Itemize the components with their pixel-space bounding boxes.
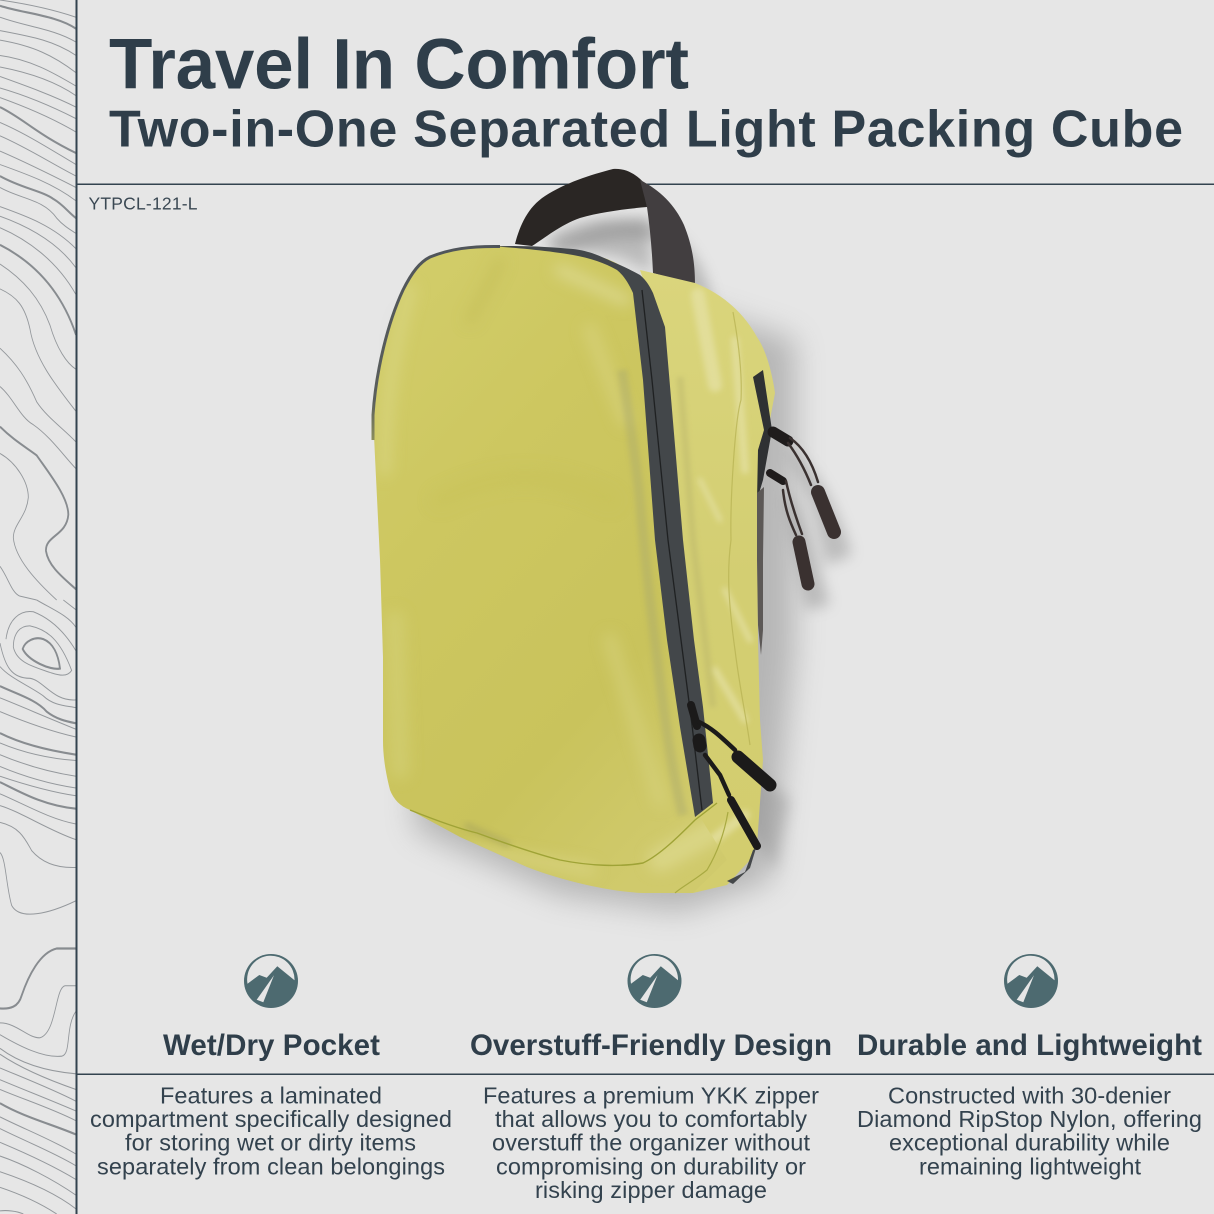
header rule [77,184,1214,185]
side seams [729,312,750,745]
product code: YTPCL-121-L [88,194,198,214]
description: Constructed with 30-denier [888,1082,1171,1108]
icon: mountain badge [244,954,298,1008]
wrinkle near base [465,825,510,845]
description: remaining lightweight [919,1154,1141,1180]
description: overstuff the organizer without [492,1130,810,1156]
feature 3: durable and lightweight [857,954,1202,1180]
right fold beside zipper [680,377,713,707]
description: compromising on durability or [496,1154,806,1180]
side panel [640,270,775,893]
feature 1: wet/dry pocket [90,954,452,1180]
icon: mountain badge [1004,954,1058,1008]
side zipper strip [727,370,772,884]
left vertical rule [76,0,78,1214]
heading: Wet/Dry Pocket [163,1029,380,1062]
upper zipper pulls [770,432,834,584]
main zipper tape [495,246,713,817]
description [90,1082,452,1180]
description: exceptional durability while [889,1130,1170,1156]
front panel shading [385,262,715,870]
description: for storing wet or dirty items [125,1130,416,1156]
description [857,1082,1202,1180]
features rule [77,1074,1214,1075]
product image: packing cube [373,169,852,912]
feature 2: overstuff-friendly design [470,954,832,1203]
title: Travel In Comfort [109,26,689,104]
description [483,1082,819,1203]
front bottom seam [410,803,717,865]
description: that allows you to comfortably [495,1106,807,1132]
carry handle [515,169,695,285]
heading: Durable and Lightweight [857,1029,1202,1062]
bag drop shadow [410,218,852,912]
description: risking zipper damage [535,1177,767,1203]
front panel binding [373,246,500,440]
description: separately from clean belongings [97,1154,445,1180]
description: Diamond RipStop Nylon, offering [857,1106,1202,1132]
heading: Overstuff-Friendly Design [470,1029,832,1062]
icon: mountain badge [628,954,682,1008]
description: Features a laminated [160,1082,382,1108]
front panel [373,246,727,893]
topographic contour strip [0,0,76,1214]
description: Features a premium YKK zipper [483,1082,819,1108]
zipper fold shadow [622,370,683,815]
lower zipper pulls [691,705,770,846]
description: compartment specifically designed [90,1106,452,1132]
side panel highlights [698,295,750,850]
subtitle: Two-in-One Separated Light Packing Cube [109,100,1183,158]
